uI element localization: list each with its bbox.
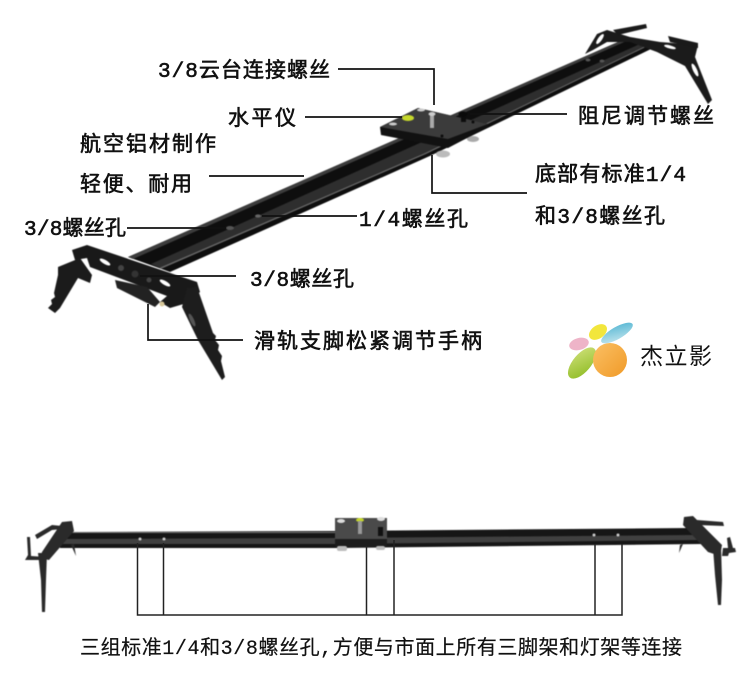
center plate — [380, 108, 488, 158]
right feet — [585, 24, 712, 104]
rail — [128, 38, 653, 272]
label: aluminium material: 航空铝材制作 — [80, 133, 216, 158]
main slider photo — [48, 24, 712, 380]
label: level: 水平仪 — [228, 107, 296, 132]
logo name: 杰立影 — [640, 344, 712, 371]
left feet — [48, 245, 225, 380]
logo — [563, 319, 712, 383]
label: bottom standard holes line 1: 底部有标准1/4 — [535, 163, 686, 188]
bottom rail — [60, 528, 702, 548]
left bracket — [25, 521, 76, 612]
right bracket — [679, 516, 736, 605]
label: 1/4 hole: 1/4螺丝孔 — [359, 208, 468, 233]
bottom slider photo — [25, 516, 736, 612]
label: 3/8 head screw: 3/8云台连接螺丝 — [158, 59, 330, 84]
leader lines — [127, 69, 567, 340]
bottom plate — [335, 517, 387, 551]
label: light and durable: 轻便、耐用 — [80, 173, 192, 198]
label: foot 3/8 hole: 3/8螺丝孔 — [250, 268, 354, 293]
bottom caption: 三组标准1/4和3/8螺丝孔,方便与市面上所有三脚架和灯架等连接 — [80, 636, 682, 661]
logo mark — [563, 319, 636, 383]
label: leg handle: 滑轨支脚松紧调节手柄 — [254, 330, 482, 355]
label: damping screw: 阻尼调节螺丝 — [578, 105, 714, 130]
label: bottom standard holes line 2: 和3/8螺丝孔 — [535, 205, 665, 230]
label: left 3/8 hole: 3/8螺丝孔 — [24, 217, 126, 242]
bracket lines to holes — [138, 540, 622, 615]
